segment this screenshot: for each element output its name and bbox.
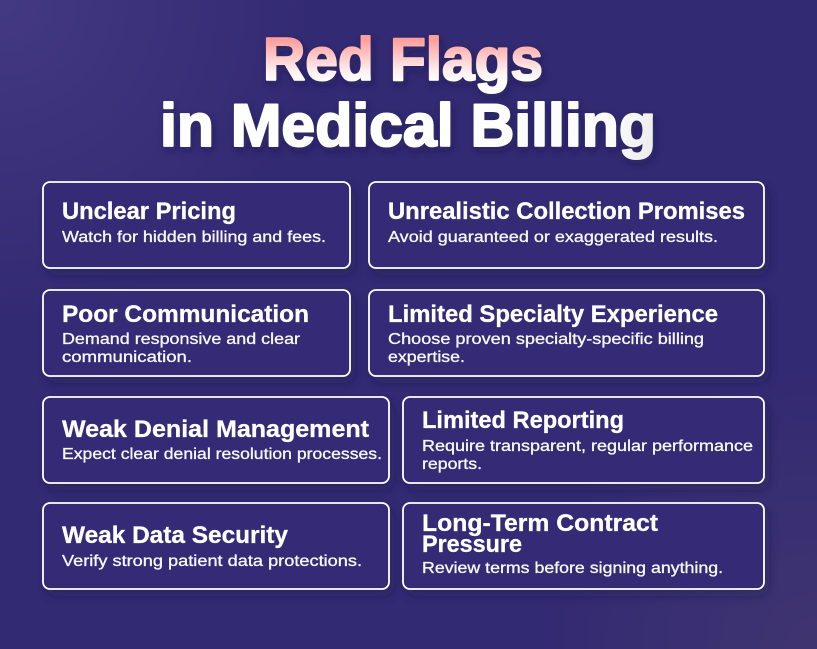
panel: Poor Communication: Demand responsive and clear <box>62 331 301 348</box>
panel: Limited Specialty Experience: Choose proven specialty-specific billing <box>388 331 704 348</box>
panel: Weak Denial Management: Weak Denial Management <box>62 416 369 443</box>
panel: Poor Communication: communication. <box>62 349 192 366</box>
panel: Limited Specialty Experience: Limited Specialty Experience <box>388 301 718 328</box>
panel: Unrealistic Collection Promises <box>369 182 764 268</box>
panel: Weak Denial Management: Expect clear denial resolution processes. <box>62 446 382 463</box>
panel: Long-Term Contract Pressure: Long-Term Contract <box>422 510 658 537</box>
panel: Weak Data Security: Weak Data Security <box>62 522 289 549</box>
panel: Unclear Pricing: Watch for hidden billing and fees. <box>62 229 326 246</box>
panel: Unrealistic Collection Promises: Unrealistic Collection Promises <box>388 198 745 225</box>
panel: Limited Reporting <box>403 397 764 483</box>
title line: in Medical Billing: in Medical Billing <box>160 92 656 159</box>
panel: Unrealistic Collection Promises: Avoid guaranteed or exaggerated results. <box>388 229 718 246</box>
panel: Limited Specialty Experience <box>369 290 764 376</box>
panel: Long-Term Contract Pressure: Review terms before signing anything. <box>422 560 723 577</box>
panel: Limited Reporting: Require transparent, regular performance <box>422 438 753 455</box>
panel: Limited Specialty Experience: expertise. <box>388 349 465 366</box>
panel: Weak Data Security: Verify strong patient data protections. <box>62 553 362 570</box>
panel: Long-Term Contract Pressure <box>403 503 764 589</box>
title line: Red Flags: Red Flags <box>263 26 543 93</box>
panel: Limited Reporting: Limited Reporting <box>422 407 624 434</box>
panel: Long-Term Contract Pressure: Pressure <box>422 531 522 558</box>
title <box>160 26 656 159</box>
panel: Weak Denial Management <box>43 397 389 483</box>
panel: Poor Communication: Poor Communication <box>62 301 309 328</box>
panel: Limited Reporting: reports. <box>422 456 482 473</box>
panel: Unclear Pricing <box>43 182 350 268</box>
panel: Weak Data Security <box>43 503 389 589</box>
panel: Poor Communication <box>43 290 350 376</box>
panel: Unclear Pricing: Unclear Pricing <box>62 198 236 225</box>
